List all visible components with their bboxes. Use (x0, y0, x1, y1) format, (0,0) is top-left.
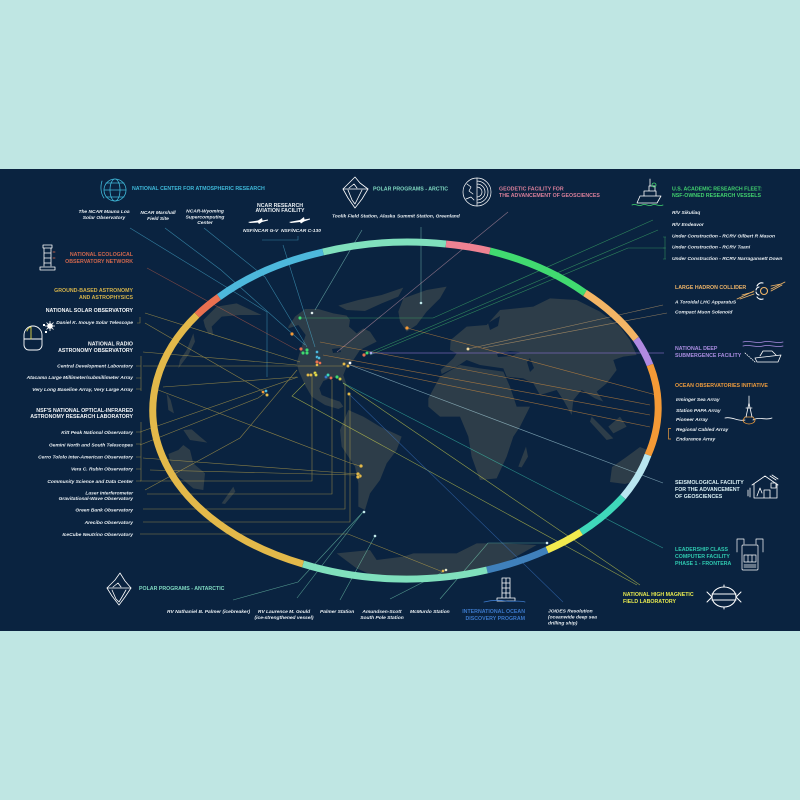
group: seismological (675, 475, 778, 500)
heading: SEISMOLOGICAL FACILITY (675, 480, 744, 486)
heading: OF GEOSCIENCES (675, 494, 723, 500)
group: geodetic (463, 178, 600, 206)
array list: Regional Cabled Array (676, 427, 729, 433)
icon: iceberg (107, 573, 131, 605)
line: ecological network (147, 268, 297, 350)
icon: collider (737, 282, 785, 299)
optical-infrared list: Gemini North and South Telescopes (49, 442, 133, 448)
heading: U.S. ACADEMIC RESEARCH FLEET: (672, 186, 762, 192)
group: deep submergence (675, 341, 783, 362)
other observatories list: Arecibo Observatory (84, 520, 133, 526)
optical-infrared list: Cerro Tololo Inter-American Observatory (38, 454, 133, 460)
leader lines (130, 212, 667, 602)
line: deep submergence (372, 352, 664, 354)
heading: AND ASTROPHYSICS (79, 295, 133, 301)
label: Toolik: Toolik Field Station, Alaska (332, 214, 396, 220)
label: McMurdo: McMurdo Station (410, 609, 450, 615)
optical-infrared list: Community Science and Data Center (47, 479, 134, 485)
heading: NATIONAL HIGH MAGNETIC (623, 592, 694, 598)
Australia and New Zealand at left (168, 445, 235, 504)
dark panel (0, 169, 800, 631)
heading: optical-infrared: NSF'S NATIONAL OPTICAL-INFRARED (36, 408, 133, 414)
heading: NSF-OWNED RESEARCH VESSELS (672, 193, 761, 199)
optical-infrared list: Kitt Peak National Observatory (61, 431, 133, 436)
label: Wyoming: NCAR-Wyoming (186, 210, 224, 214)
heading: solar observatory: NATIONAL SOLAR OBSERVATORY (46, 308, 133, 314)
line: ocean discovery (350, 395, 563, 602)
icon: plane C-130 (289, 217, 310, 224)
Africa and Madagascar (428, 365, 530, 480)
other observatories list: Gravitational-Wave Observatory (59, 496, 133, 502)
label: Marshall: NCAR Marshall (140, 211, 176, 216)
icon: iceberg (343, 177, 368, 208)
icon: drilling tower (484, 578, 525, 602)
icon: magnet (707, 585, 741, 609)
heading: GROUND-BASED ASTRONOMY (54, 288, 133, 294)
group: research fleet (632, 179, 782, 262)
group: ecological network (40, 245, 134, 270)
heading: INTERNATIONAL OCEAN (462, 609, 525, 615)
optical-infrared list: Vera C. Rubin Observatory (71, 466, 133, 472)
heading: THE ADVANCEMENT OF GEOSCIENCES (499, 193, 600, 199)
icon: ship (632, 179, 663, 206)
experiments list: A Toroidal LHC ApparatuS (675, 300, 736, 306)
radio astronomy list: Atacama Large Millimeter/submillimeter Array (26, 375, 133, 381)
label: Palmer vessel: RV Nathaniel B. Palmer (icebreaker) (167, 609, 251, 615)
icon: house (748, 475, 778, 498)
line: computing (343, 383, 663, 548)
icon: plane G-V (248, 218, 268, 224)
group: ocean observatories (668, 383, 772, 442)
label: Mauna Loa: Solar Observatory (83, 215, 125, 221)
label: South Pole: Amundsen-Scott (362, 610, 402, 615)
lines: ocean observatories (320, 328, 660, 427)
group: magnetic field (623, 585, 741, 609)
heading: aviation facility: NCAR RESEARCH (257, 203, 303, 209)
label: JOIDES Resolution: JOIDES Resolution (548, 610, 593, 614)
label: Inouye: Daniel K. Inouye Solar Telescope (56, 320, 133, 326)
radio astronomy list: Very Long Baseline Array, Very Large Array (32, 387, 133, 393)
bracket (668, 428, 671, 439)
Eurasia (441, 298, 637, 440)
heading: NATIONAL DEEP (675, 346, 717, 352)
label: Marshall: Field Site (147, 216, 169, 222)
facility location dots (262, 302, 548, 572)
lines: astronomy (136, 313, 443, 572)
other observatories list: Laser Interferometer (85, 492, 133, 496)
group: large hadron collider (674, 282, 785, 316)
label: C-130: NSF/NCAR C-130 (281, 228, 321, 234)
heading: DISCOVERY PROGRAM (465, 616, 526, 622)
group: polar arctic (332, 177, 461, 220)
heading: GEODETIC FACILITY FOR (499, 186, 564, 192)
heading: LARGE HADRON COLLIDER (675, 285, 746, 291)
heading: POLAR PROGRAMS - ANTARCTIC (139, 586, 225, 592)
heading: NATIONAL ECOLOGICAL (70, 252, 133, 258)
heading: national center for atmospheric research: NATIONAL CENTER FOR ATMOSPHERIC RESEARCH (132, 186, 265, 192)
icon: tower (40, 245, 55, 270)
icon: sun and stars (43, 321, 55, 333)
lines: polar antarctic (233, 512, 547, 600)
heading: SUBMERGENCE FACILITY (675, 353, 742, 359)
South America (340, 410, 402, 510)
vessel list: Under Construction - RCRV Gilbert R Mason (672, 234, 775, 240)
lines: magnetic field (292, 383, 640, 585)
radio astronomy list: Central Development Laboratory (57, 364, 133, 370)
heading: PHASE 1 - FRONTERA (675, 561, 732, 567)
array list: Endurance Array (676, 436, 716, 442)
label: Summit: Summit Station, Greenland (397, 214, 461, 220)
vessel list: Under Construction - RCRV Narragansett Down (672, 256, 782, 262)
heading: COMPUTER FACILITY (675, 554, 730, 560)
heading: POLAR PROGRAMS - ARCTIC (373, 186, 448, 192)
heading: optical-infrared: ASTRONOMY RESEARCH LABORATORY (30, 414, 133, 420)
icon: boat (745, 351, 781, 362)
vessel list: Under Construction - RCRV Taani (672, 244, 751, 250)
label: Palmer Station: Palmer Station (320, 609, 354, 615)
vessel list: R/V Endeavor (672, 222, 705, 228)
array list: Pioneer Array (676, 417, 708, 423)
Eastern Siberia, Japan and islands at left (167, 303, 262, 443)
lines: large hadron collider (468, 305, 667, 349)
world map (167, 287, 660, 582)
label: South Pole: South Pole Station (360, 615, 404, 621)
icon: waves (743, 341, 783, 347)
label: Mauna Loa: The NCAR Mauna Loa (78, 210, 130, 215)
heading: FOR THE ADVANCEMENT (675, 487, 741, 493)
label: G-V: NSF/NCAR G-V (243, 228, 279, 234)
vessel list: R/V Sikuliaq (672, 211, 700, 216)
group: ocean discovery (462, 578, 526, 622)
lines: NCAR (130, 228, 315, 377)
group: astronomy labels (24, 288, 134, 538)
heading: OCEAN OBSERVATORIES INITIATIVE (675, 383, 768, 389)
label: JOIDES Resolution: (oceanwide deep sea (548, 614, 597, 620)
heading: aviation facility: AVIATION FACILITY (255, 208, 305, 214)
Antarctica (337, 544, 536, 576)
label: Wyoming: Center (197, 220, 214, 226)
label: Gould: RV Laurence M. Gould (258, 610, 310, 615)
label: Gould: (ice-strengthened vessel) (255, 615, 314, 621)
other observatories list: IceCube Neutrino Observatory (62, 532, 133, 538)
ring of program colours (153, 242, 658, 579)
array list: Irminger Sea Array (676, 398, 720, 403)
line: geodetic (337, 212, 508, 352)
group: polar antarctic labels (107, 573, 450, 621)
icon: globe (101, 179, 126, 201)
other observatories list: Green Bank Observatory (75, 508, 133, 514)
label: JOIDES Resolution: drilling ship) (548, 620, 578, 626)
icon: telescope dome (24, 326, 42, 350)
group: NCAR (78, 179, 321, 234)
heading: OBSERVATORY NETWORK (65, 259, 133, 265)
experiments list: Compact Muon Solenoid (675, 310, 733, 316)
heading: LEADERSHIP CLASS (675, 547, 728, 553)
lines: polar arctic (315, 227, 421, 310)
array list: Station PAPA Array (676, 408, 721, 414)
Greenland (398, 287, 447, 332)
label: Wyoming: Supercomputing (186, 214, 224, 220)
heading: radio astronomy: NATIONAL RADIO (88, 342, 133, 348)
heading: FIELD LABORATORY (623, 599, 676, 605)
icon: supercomputer (737, 539, 763, 570)
Australia at right (610, 447, 648, 484)
group: leadership computing (675, 539, 763, 570)
inland seas (332, 316, 534, 372)
line: seismological (350, 365, 663, 483)
heading: radio astronomy: ASTRONOMY OBSERVATORY (58, 348, 133, 354)
icon: concentric earth (463, 178, 491, 206)
lines: research fleet (300, 220, 666, 355)
icon: buoy (725, 396, 772, 424)
North America (288, 288, 403, 409)
